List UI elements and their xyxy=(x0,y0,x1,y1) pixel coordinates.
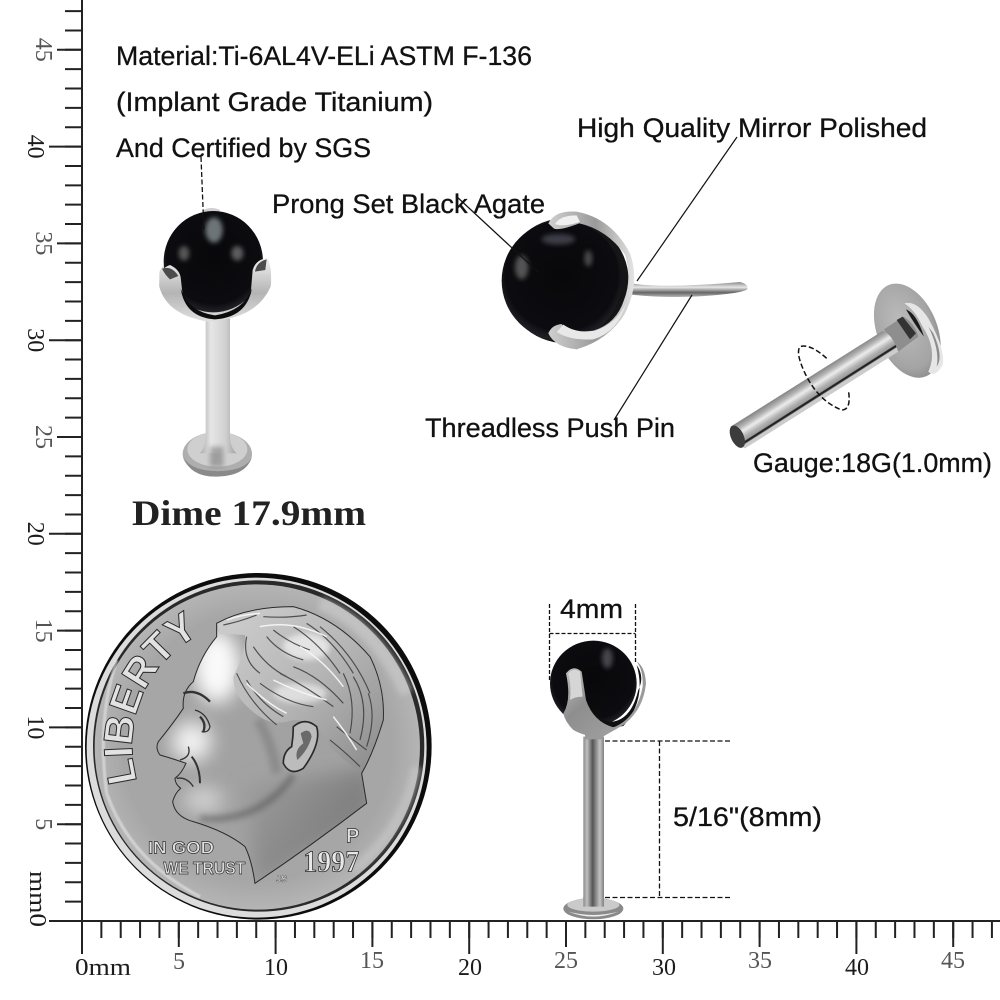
horizontal ruler labels: 10 xyxy=(264,955,288,981)
horizontal ruler labels: 40 xyxy=(845,955,869,981)
product: left stud, front view xyxy=(159,208,271,477)
text: material specification: (Implant Grade Titanium) xyxy=(116,87,433,117)
horizontal ruler labels: 25 xyxy=(554,948,578,974)
product: bottom stud with dimensions xyxy=(550,641,646,919)
vertical ruler labels: 35 xyxy=(30,231,56,255)
coin motto: P xyxy=(346,826,359,848)
vertical ruler labels: 30 xyxy=(22,328,48,352)
label: threadless push pin: Threadless Push Pin xyxy=(425,413,675,443)
dimension: post length xyxy=(605,741,730,898)
horizontal ruler labels: 0mm xyxy=(75,955,131,981)
horizontal ruler labels: 5 xyxy=(173,949,185,975)
label: high quality mirror polished: High Quality Mirror Polished xyxy=(577,113,927,143)
vertical ruler labels: 25 xyxy=(30,425,56,449)
text: material specification xyxy=(116,41,532,163)
vertical ruler labels: mm0 xyxy=(24,871,50,927)
horizontal ruler labels: 20 xyxy=(458,955,482,981)
dashed leader: material to ball xyxy=(201,157,204,232)
label: gauge: Gauge:18G(1.0mm) xyxy=(753,448,992,478)
leader: prong set xyxy=(456,196,538,272)
text: material specification: Material:Ti-6AL4V-ELi ASTM F-136 xyxy=(116,41,532,71)
coin motto: IN GOD xyxy=(148,837,214,857)
coin portrait xyxy=(153,603,387,887)
vertical ruler labels: 20 xyxy=(22,522,48,546)
vertical ruler labels: 5 xyxy=(30,818,56,830)
horizontal ruler labels xyxy=(75,948,965,981)
coin eye and mouth xyxy=(177,692,210,787)
label: 4mm: 4mm xyxy=(560,594,623,624)
product: centre stud, side view xyxy=(502,211,747,349)
coin: dime xyxy=(85,573,432,920)
horizontal ruler labels: 45 xyxy=(941,948,965,974)
product: threadless back post xyxy=(727,274,954,450)
heading: dime size: Dime 17.9mm xyxy=(132,493,366,533)
coin motto xyxy=(148,826,359,884)
vertical ruler labels: 15 xyxy=(30,619,56,643)
leader: mirror polished xyxy=(637,137,737,281)
vertical ruler labels xyxy=(22,38,56,927)
label: post length: 5/16"(8mm) xyxy=(673,802,822,832)
coin motto: WE TRUST xyxy=(163,858,246,878)
horizontal ruler labels: 30 xyxy=(652,955,676,981)
gauge dashed ring xyxy=(798,346,849,410)
coin ear xyxy=(283,722,318,772)
vertical ruler labels: 10 xyxy=(22,715,48,739)
horizontal ruler labels: 15 xyxy=(360,948,384,974)
horizontal ruler labels: 35 xyxy=(748,948,772,974)
coin motto: 1997 xyxy=(303,845,359,879)
coin legend LIBERTY: LIBERTY xyxy=(103,610,192,785)
text: material specification: And Certified by SGS xyxy=(116,133,371,163)
dimension: 4mm ball width xyxy=(550,604,636,680)
coin motto: JS xyxy=(276,874,287,884)
label: prong set black agate: Prong Set Black Agate xyxy=(272,189,545,219)
vertical ruler labels: 40 xyxy=(22,135,48,159)
leader: push pin xyxy=(614,295,692,420)
vertical ruler labels: 45 xyxy=(30,38,56,62)
